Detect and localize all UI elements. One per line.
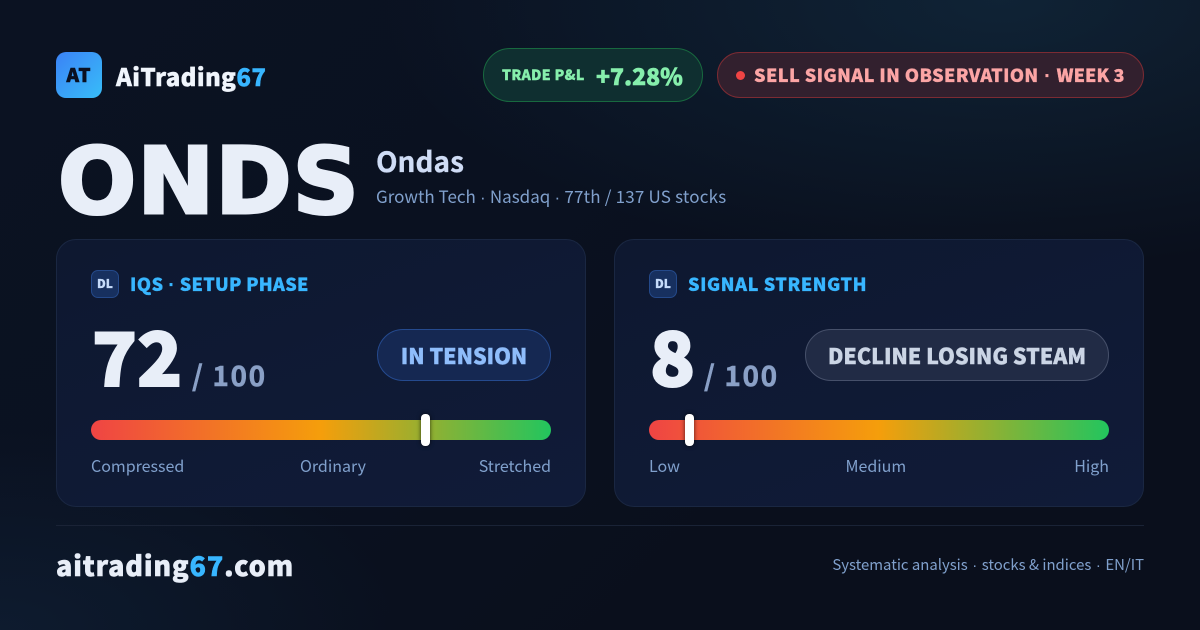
status dot — [736, 71, 745, 80]
company meta: · — [480, 188, 486, 207]
gauge label low: Compressed — [91, 453, 184, 477]
card heading: · — [168, 275, 175, 295]
score: 72 — [92, 301, 182, 408]
signal text: · — [1044, 66, 1051, 86]
signal text: SELL SIGNAL IN OBSERVATION WEEK 3 — [754, 62, 1125, 88]
gauge label mid: Medium — [846, 453, 906, 477]
logo icon: AT — [66, 61, 92, 88]
score denominator: / 100 — [192, 355, 267, 395]
score denominator: / 100 — [704, 355, 779, 395]
score: 8 — [650, 301, 695, 408]
status pill — [377, 329, 551, 381]
tagline: · — [972, 558, 977, 574]
company meta: · — [554, 188, 560, 207]
gauge bar — [649, 420, 1109, 440]
status pill: DECLINE LOSING STEAM — [828, 340, 1086, 371]
card heading: IQS SETUP PHASE — [130, 271, 309, 297]
gauge label mid: Ordinary — [300, 453, 366, 477]
ticker: ONDS — [58, 128, 360, 235]
card heading: SIGNAL STRENGTH — [688, 271, 867, 297]
company meta: Growth Tech Nasdaq 77th / 137 US stocks — [376, 183, 726, 208]
gauge label high: Stretched — [479, 453, 551, 477]
brand name: AiTrading67 — [116, 58, 266, 93]
card icon — [91, 270, 119, 298]
tagline: · — [1096, 558, 1101, 574]
panel: signal strength — [614, 239, 1144, 507]
logo icon — [56, 52, 102, 98]
gauge marker — [685, 414, 694, 446]
status pill — [805, 329, 1109, 381]
P&L value: +7.28% — [596, 58, 683, 92]
tagline: Systematic analysis stocks & indices EN/IT — [832, 554, 1144, 575]
P&L badge — [483, 48, 703, 102]
P&L label: TRADE P&L — [502, 65, 585, 85]
gauge bar — [91, 420, 551, 440]
card icon: DL — [97, 275, 113, 292]
card icon — [649, 270, 677, 298]
gauge marker — [421, 414, 430, 446]
status pill: IN TENSION — [401, 340, 527, 371]
company name: Ondas — [376, 141, 464, 181]
divider — [56, 525, 1144, 526]
panel: IQS setup phase — [56, 239, 586, 507]
website: aitrading67.com — [56, 545, 294, 584]
sell signal badge — [717, 52, 1144, 98]
card icon: DL — [655, 275, 671, 292]
gauge label low: Low — [649, 453, 680, 477]
gauge label high: High — [1074, 453, 1109, 477]
